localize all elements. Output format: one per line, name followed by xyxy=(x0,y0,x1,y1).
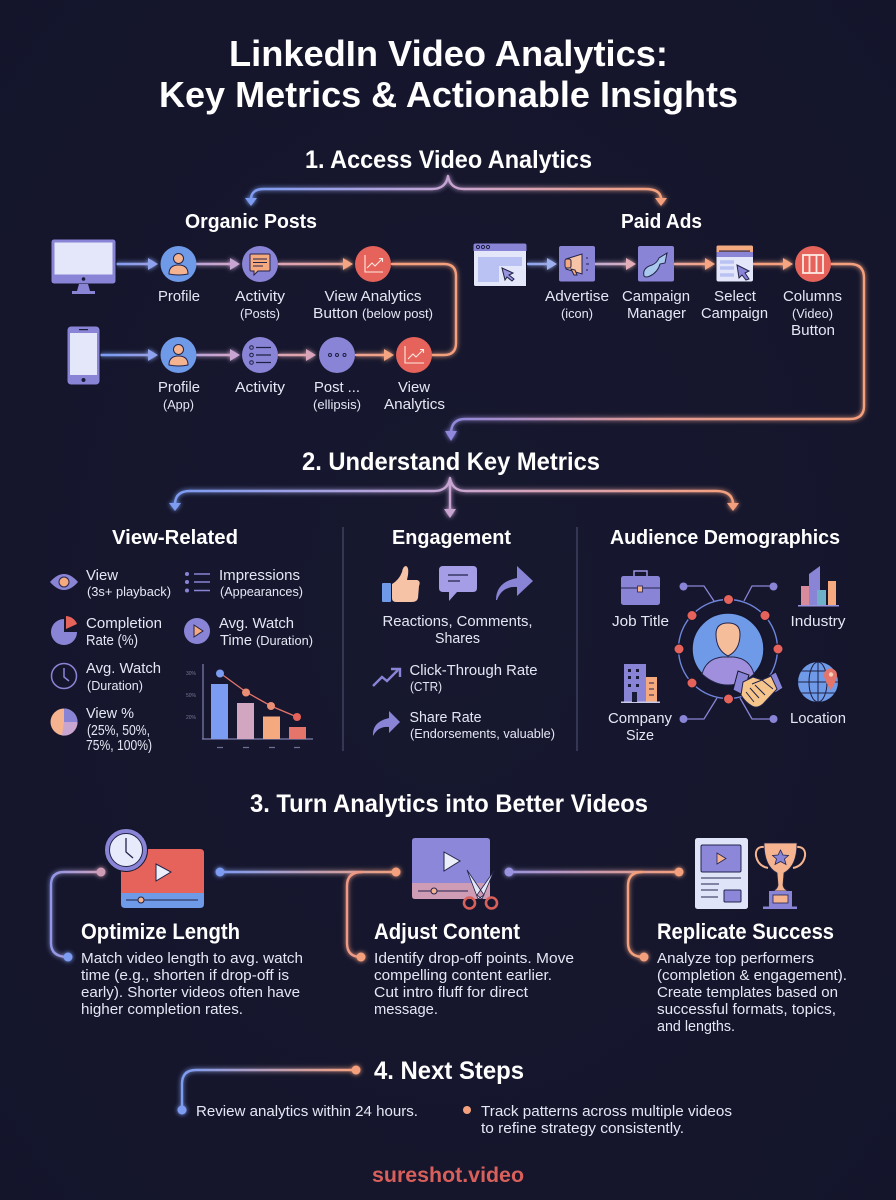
icon: video with scissors xyxy=(412,838,497,908)
bullet xyxy=(463,1106,471,1114)
text: optimize length: Match video length to avg. watch xyxy=(81,951,303,967)
heading: section 4: 4. Next Steps xyxy=(374,1057,524,1085)
label: post ellipsis: (ellipsis) xyxy=(313,398,361,412)
bar chart: viewer drop-off: 30% xyxy=(186,671,197,677)
text: click-through rate xyxy=(410,663,538,694)
text: track patterns: to refine strategy consistently. xyxy=(481,1121,684,1137)
icon: desktop monitor xyxy=(51,239,116,294)
icon: central audience ring with person xyxy=(674,582,783,723)
label: view analytics button xyxy=(313,289,433,322)
heading: section 3: 3. Turn Analytics into Better Videos xyxy=(250,790,648,818)
text: adjust content: compelling content earlier. xyxy=(374,968,552,984)
text: view percent: 75%, 100%) xyxy=(86,738,152,754)
label: profile: Profile xyxy=(158,289,200,305)
icon: comment bubble xyxy=(439,566,477,601)
icon: select campaign xyxy=(716,246,753,282)
footer brand: sureshot.video xyxy=(372,1164,524,1187)
label: view analytics button: View Analytics xyxy=(324,289,422,305)
text: avg watch duration xyxy=(86,661,161,693)
arrow: bracket to organic and paid xyxy=(245,176,667,206)
text: click-through rate: Click-Through Rate xyxy=(410,663,538,679)
text: replicate success: and lengths. xyxy=(657,1019,735,1035)
icon: browser with cursor xyxy=(474,244,526,286)
text: optimize length xyxy=(81,919,303,1018)
section 3: turn analytics into better videos xyxy=(51,790,847,1035)
text: reactions comments shares xyxy=(382,614,532,647)
text: optimize length: early). Shorter videos often have xyxy=(81,985,300,1001)
text: adjust content: Adjust Content xyxy=(374,919,521,944)
icon: view percent pie xyxy=(50,708,78,736)
label: profile app xyxy=(158,380,200,412)
text: reactions comments shares: Shares xyxy=(435,631,480,647)
label: select campaign xyxy=(701,289,768,322)
connector: next steps xyxy=(178,1066,360,1114)
label: company size xyxy=(608,711,673,744)
label: profile app: (App) xyxy=(163,398,194,412)
arrows: paid flow and return to metrics xyxy=(445,258,864,441)
divider xyxy=(343,527,577,751)
label: activity: Activity xyxy=(235,380,286,396)
label: post ellipsis xyxy=(313,380,361,412)
text: track patterns: Track patterns across multiple videos xyxy=(481,1104,732,1120)
text: avg watch time xyxy=(219,616,313,649)
label: post ellipsis: Post ... xyxy=(314,380,360,396)
label: industry: Industry xyxy=(790,614,846,630)
text: view xyxy=(86,568,171,599)
text: replicate success: Create templates based on xyxy=(657,985,838,1001)
text: track patterns xyxy=(481,1104,732,1137)
text: optimize length: Optimize Length xyxy=(81,919,240,944)
label: select campaign: Select xyxy=(714,289,756,305)
label: view analytics: View xyxy=(398,380,431,396)
label: advertise xyxy=(545,289,609,321)
text: reactions comments shares: Reactions, Comments, xyxy=(382,614,532,630)
bar chart: viewer drop-off: 50% xyxy=(186,693,197,699)
arrow: bracket to metric columns xyxy=(169,478,739,518)
text: view: View xyxy=(86,568,119,584)
icon: thumbs up xyxy=(382,566,420,602)
icon: phone xyxy=(67,326,100,385)
icon: clock xyxy=(52,664,76,688)
text: optimize length: time (e.g., shorten if drop-off is xyxy=(81,968,289,984)
text: share rate: Share Rate xyxy=(410,710,482,726)
icon: profile app xyxy=(160,337,196,373)
label: activity posts xyxy=(235,289,286,321)
icon: activity list xyxy=(242,337,278,373)
text: replicate success: successful formats, topics, xyxy=(657,1002,836,1018)
icon: profile xyxy=(160,246,196,282)
text: completion rate: Completion xyxy=(86,616,162,632)
heading: engagement: Engagement xyxy=(392,527,511,549)
bar chart: viewer drop-off xyxy=(186,664,313,748)
label: profile app: Profile xyxy=(158,380,200,396)
icon: share rate arrow xyxy=(373,711,400,736)
label: advertise: Advertise xyxy=(545,289,609,305)
label: campaign manager: Manager xyxy=(627,306,686,322)
icon: trend arrow xyxy=(373,669,400,686)
heading: organic posts: Organic Posts xyxy=(185,211,317,233)
text: impressions xyxy=(219,568,303,599)
text: optimize length: higher completion rates. xyxy=(81,1002,243,1018)
icon: eye xyxy=(50,574,78,590)
text: completion rate xyxy=(86,616,162,649)
section 4: next steps xyxy=(178,1057,732,1137)
heading: view-related: View-Related xyxy=(112,527,238,549)
text: avg watch time: (Duration) xyxy=(256,634,313,648)
label: location: Location xyxy=(790,711,846,727)
text: adjust content: message. xyxy=(374,1002,438,1018)
label: columns button: Columns xyxy=(783,289,842,305)
text: replicate success: Analyze top performers xyxy=(657,951,814,967)
label: job title: Job Title xyxy=(612,614,669,630)
label: activity posts: (Posts) xyxy=(240,307,280,321)
icon: building company size xyxy=(621,664,660,703)
heading: section 1: 1. Access Video Analytics xyxy=(305,146,592,174)
section 1: access video analytics xyxy=(51,146,864,441)
text: avg watch duration: (Duration) xyxy=(87,679,143,693)
label: columns button: (Video) xyxy=(792,307,833,321)
icon: briefcase xyxy=(621,571,660,605)
text: replicate success: Replicate Success xyxy=(657,919,834,944)
text: replicate success: (completion & engagement). xyxy=(657,968,847,984)
section 2: understand key metrics xyxy=(50,448,846,754)
icon: view analytics xyxy=(396,337,432,373)
text: view percent: View % xyxy=(86,706,134,722)
text: avg watch duration: Avg. Watch xyxy=(86,661,161,677)
text: share rate: (Endorsements, valuable) xyxy=(410,727,555,741)
text: completion rate: Rate (%) xyxy=(86,633,138,649)
panel: engagement xyxy=(373,527,555,741)
text: review analytics: Review analytics within 24 hours. xyxy=(196,1104,418,1120)
text: impressions: (Appearances) xyxy=(220,585,303,599)
text: avg watch time: Time xyxy=(220,633,252,649)
label: advertise: (icon) xyxy=(561,307,593,321)
text: avg watch time: Avg. Watch xyxy=(219,616,294,632)
text: impressions: Impressions xyxy=(219,568,300,584)
label: view analytics button: (below post) xyxy=(362,307,433,321)
icon: video with clock xyxy=(104,828,204,908)
icon: view analytics button xyxy=(355,246,391,282)
heading: section 2: 2. Understand Key Metrics xyxy=(302,448,600,476)
icon: ellipsis xyxy=(319,337,355,373)
text: replicate success xyxy=(657,919,847,1035)
heading: audience demographics: Audience Demographics xyxy=(610,527,840,549)
panel: view-related xyxy=(50,527,313,754)
icon: impressions list xyxy=(185,572,210,592)
heading: paid ads: Paid Ads xyxy=(621,211,702,233)
text: adjust content: Cut intro fluff for direct xyxy=(374,985,528,1001)
icon: completion pie xyxy=(51,616,77,645)
text: adjust content: Identify drop-off points. Move xyxy=(374,951,574,967)
icon: megaphone xyxy=(559,246,595,282)
icon: columns button xyxy=(795,246,831,282)
title: LinkedIn Video Analytics: xyxy=(229,33,668,74)
icon: document and trophy xyxy=(695,838,805,909)
icon: globe with pin xyxy=(798,662,838,702)
label: view analytics button: Button xyxy=(313,306,358,322)
bar chart: viewer drop-off: 20% xyxy=(186,715,197,721)
label: company size: Company xyxy=(608,711,673,727)
text: click-through rate: (CTR) xyxy=(410,680,442,694)
connectors: section 3 xyxy=(51,868,684,962)
icon: avg watch time play xyxy=(184,618,210,644)
text: share rate xyxy=(410,710,555,741)
text: adjust content xyxy=(374,919,574,1018)
icon: handshake xyxy=(733,671,783,707)
text: view percent: (25%, 50%, xyxy=(87,723,150,739)
title: Key Metrics & Actionable Insights xyxy=(159,74,738,115)
text: view: (3s+ playback) xyxy=(87,585,171,599)
icon: campaign manager xyxy=(638,246,674,282)
label: select campaign: Campaign xyxy=(701,306,768,322)
label: company size: Size xyxy=(626,728,654,744)
label: view analytics xyxy=(384,380,445,413)
label: view analytics: Analytics xyxy=(384,397,445,413)
label: activity posts: Activity xyxy=(235,289,286,305)
arrows: organic flow xyxy=(101,258,456,361)
icon: city industry xyxy=(798,566,839,606)
text: view percent xyxy=(86,706,152,754)
label: columns button xyxy=(783,289,842,339)
panel: audience demographics xyxy=(608,527,846,744)
label: campaign manager: Campaign xyxy=(622,289,690,305)
icon: share arrow xyxy=(496,566,533,600)
label: columns button: Button xyxy=(791,323,835,339)
icon: activity posts xyxy=(242,246,278,282)
label: campaign manager xyxy=(622,289,690,322)
title xyxy=(159,33,738,115)
